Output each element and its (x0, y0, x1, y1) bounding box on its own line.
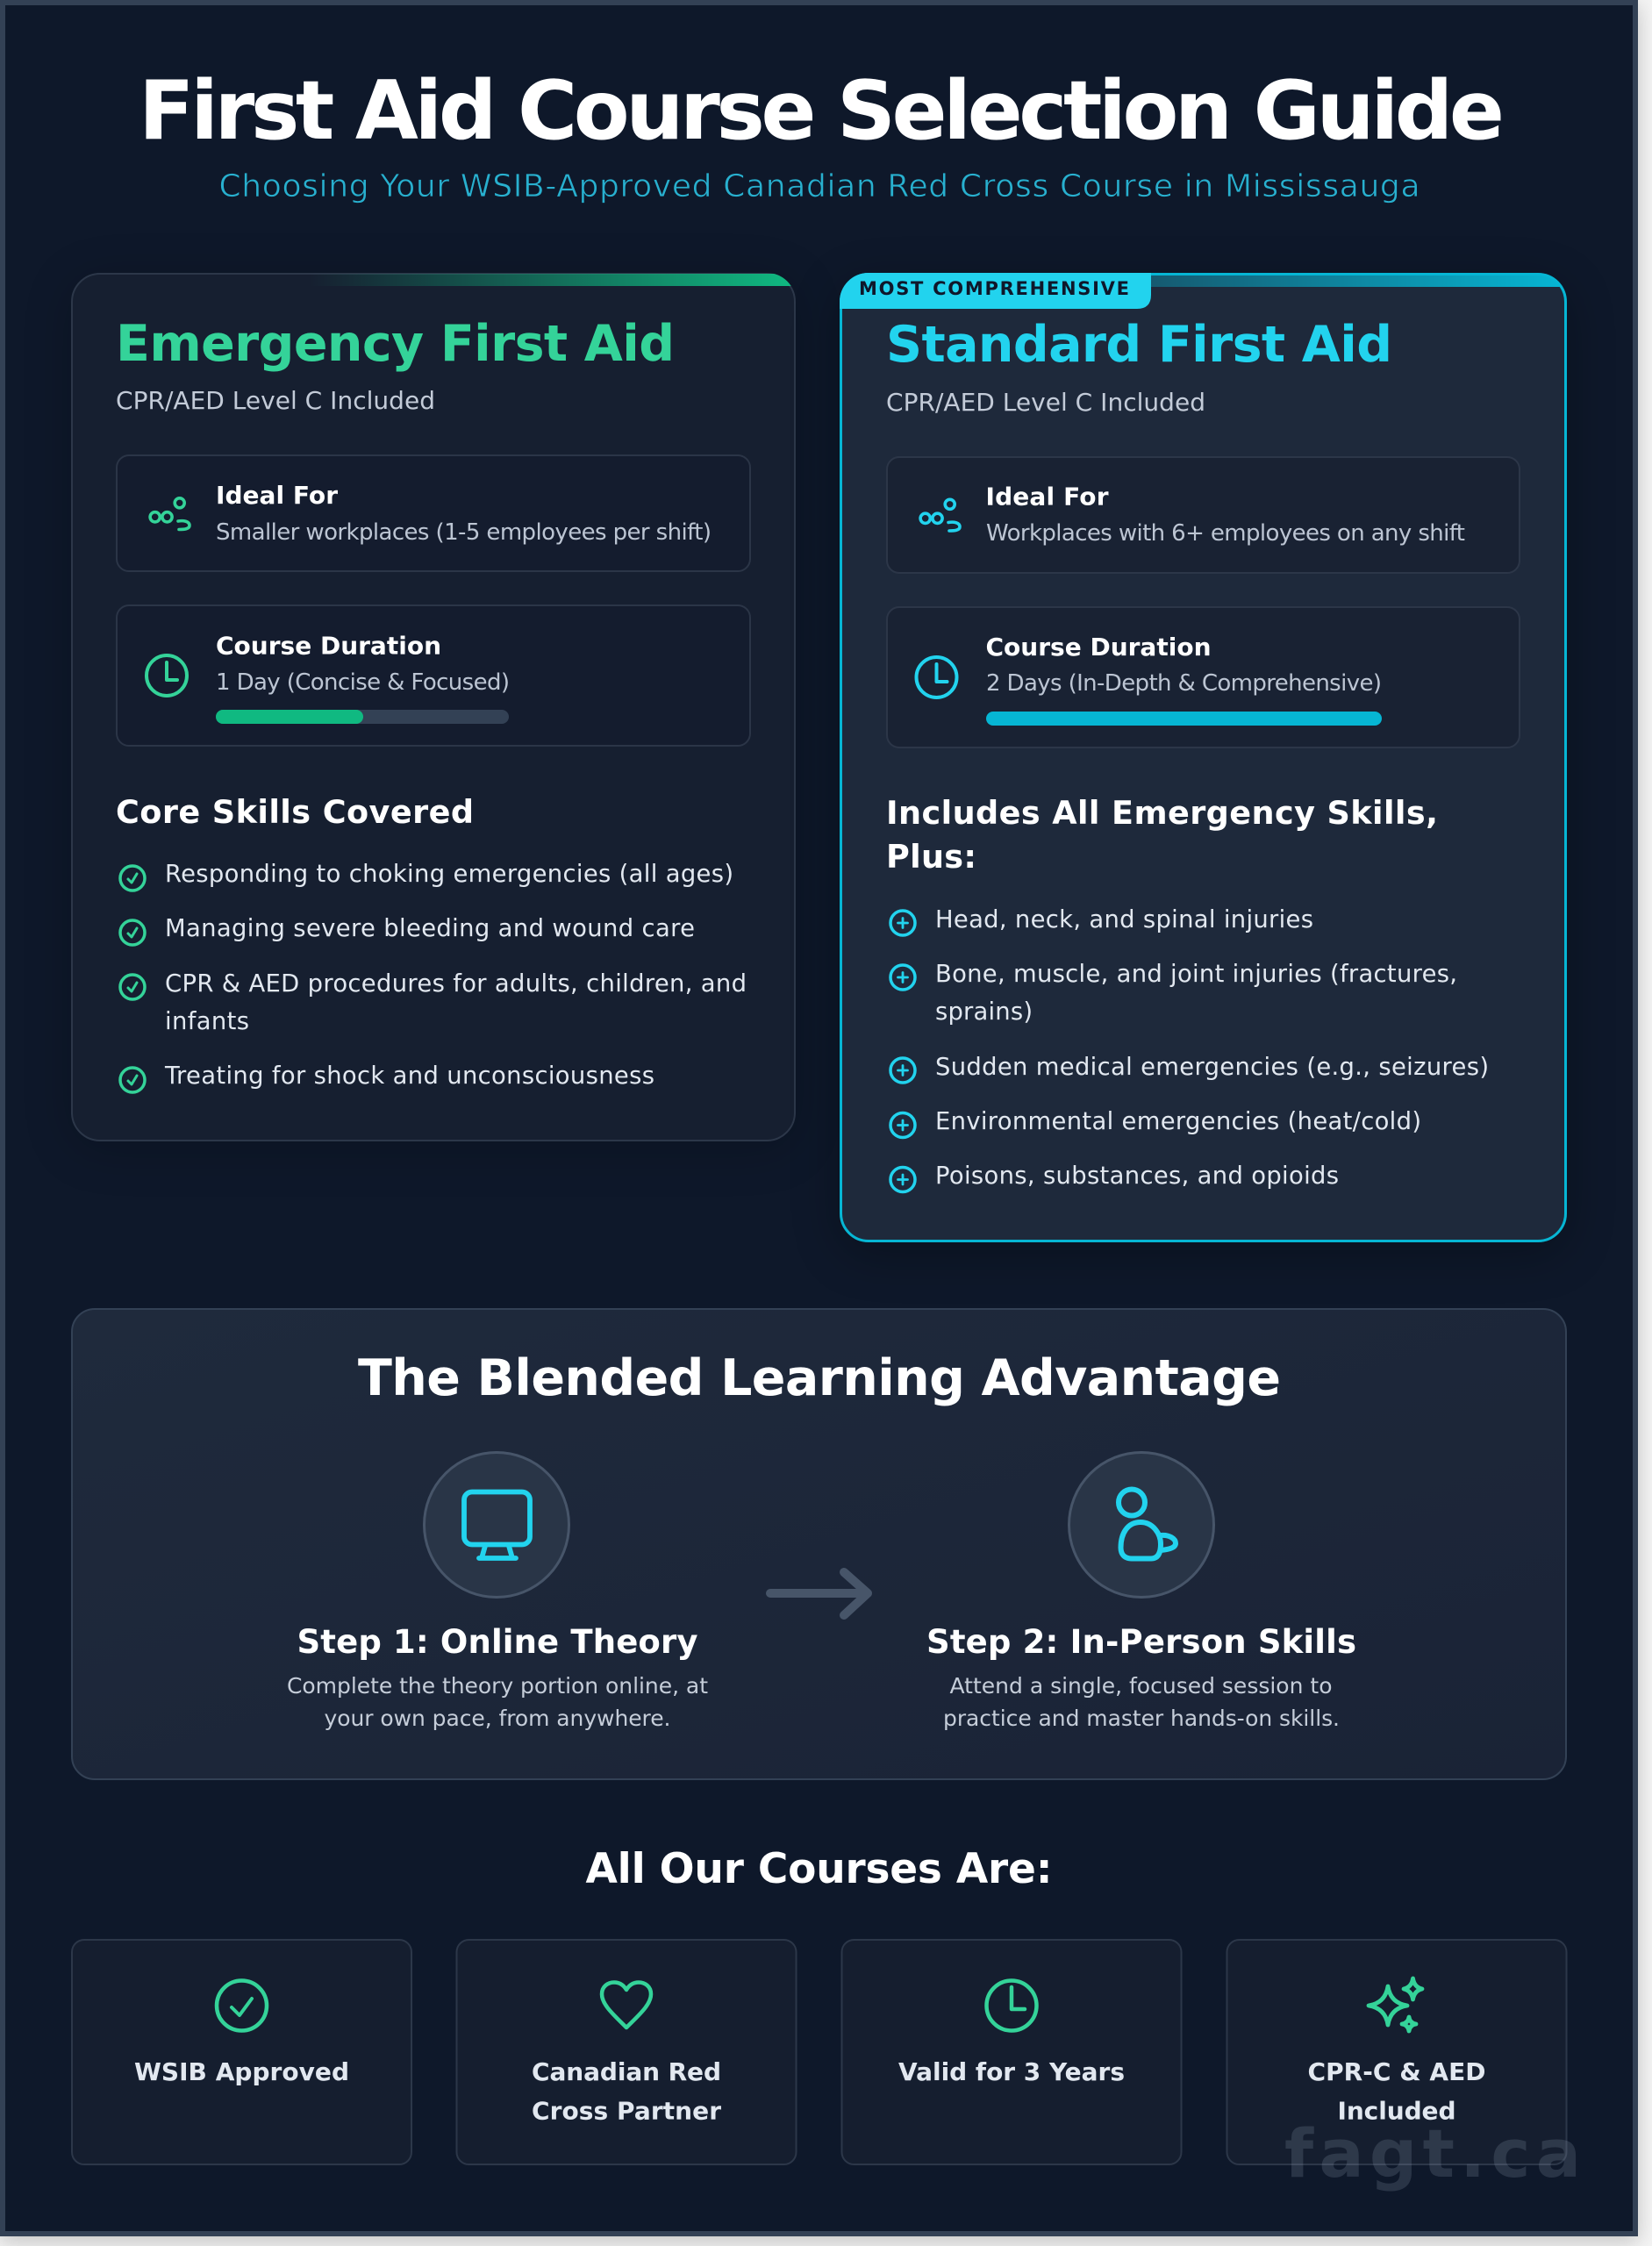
description: 2 Days (In-Depth & Comprehensive) (986, 670, 1382, 697)
info box: ideal for (887, 457, 1520, 573)
description: 1 Day (Concise & Focused) (216, 669, 510, 696)
label: Canadian Red (532, 2057, 721, 2086)
item: Responding to choking emergencies (all ages) (165, 861, 733, 888)
icon: clock (986, 1981, 1037, 2030)
tile: Canadian Red Cross partner (456, 1940, 797, 2164)
duration bar (986, 712, 1382, 726)
icon: plus (890, 1058, 915, 1083)
icon: clock (916, 657, 956, 697)
subheading: CPR/AED Level C Included (886, 388, 1205, 417)
subheading: CPR/AED Level C Included (116, 386, 435, 415)
label: Valid for 3 Years (898, 2057, 1125, 2086)
label (532, 2057, 721, 2125)
item: Poisons, substances, and opioids (935, 1162, 1339, 1190)
item: Sudden medical emergencies (e.g., seizures) (935, 1054, 1489, 1081)
item: Head, neck, and spinal injuries (935, 906, 1313, 933)
label: Course Duration (216, 632, 441, 660)
icon: plus (890, 1112, 915, 1137)
info box: course duration (117, 605, 750, 746)
step description: Attend a single, focused session to (949, 1673, 1332, 1699)
item: Treating for shock and unconsciousness (164, 1062, 654, 1090)
icon: monitor (425, 1453, 569, 1597)
heading: core skills: Core Skills Covered (116, 793, 474, 831)
step 2 (926, 1453, 1356, 1731)
icon: check (120, 866, 145, 891)
label: WSIB Approved (134, 2057, 349, 2086)
duration bar (216, 710, 509, 724)
item: CPR & AED procedures for adults, children, and (165, 970, 747, 998)
icon: plus (890, 1167, 915, 1191)
heading: Emergency First Aid: Emergency First Aid (116, 315, 675, 373)
icon: sparkles (1369, 1978, 1422, 2031)
title: First Aid Course Selection Guide (139, 63, 1505, 158)
description: Workplaces with 6+ employees on any shift (986, 520, 1465, 547)
tile: valid for 3 years (842, 1940, 1181, 2164)
badge: most comprehensive (840, 273, 1151, 309)
step 1 (287, 1453, 708, 1731)
heading: Standard First Aid: Standard First Aid (886, 316, 1392, 374)
list: additional skills (890, 906, 1489, 1191)
icon: check circle (217, 1981, 267, 2030)
label (1307, 2057, 1486, 2125)
icon: check (120, 1068, 145, 1092)
step description: practice and master hands-on skills. (943, 1706, 1340, 1731)
icon: plus (890, 965, 915, 990)
heading: includes all emergency skills: Includes All Emergency Skills, (886, 794, 1438, 832)
icon: people (920, 499, 960, 531)
item: Managing severe bleeding and wound care (165, 915, 695, 942)
panel: blended learning (72, 1309, 1566, 1779)
label: Included (1337, 2097, 1456, 2125)
item: Bone, muscle, and joint injuries (fractures, (935, 961, 1457, 988)
label: Ideal For (986, 483, 1109, 511)
heading: includes all emergency skills (886, 794, 1438, 876)
step description (287, 1673, 708, 1731)
icon: people (150, 498, 190, 530)
label: Course Duration (986, 633, 1211, 662)
label: Ideal For (216, 481, 338, 510)
watermark: fagt.ca (1284, 2114, 1581, 2192)
icon: check (120, 920, 145, 945)
tile: WSIB approved (72, 1940, 411, 2164)
icon: clock (147, 655, 187, 696)
icon: check (120, 975, 145, 999)
list: core skills (120, 861, 747, 1092)
item continuation: infants (165, 1008, 249, 1035)
panel: Emergency First Aid (71, 274, 796, 1149)
heading: The Blended Learning Advantage (358, 1349, 1281, 1407)
icon: heart (602, 1983, 651, 2028)
tile: CPR-C and AED included (1226, 1940, 1567, 2164)
icon: person (1069, 1453, 1214, 1597)
info box: ideal for (117, 455, 750, 571)
item: Environmental emergencies (heat/cold) (935, 1108, 1421, 1135)
step title: Step 2: In-Person Skills (926, 1623, 1356, 1661)
badge: most comprehensive: MOST COMPREHENSIVE (859, 278, 1129, 299)
step title: Step 1: Online Theory (297, 1623, 698, 1661)
arrow (770, 1572, 868, 1615)
heading: includes all emergency skills: Plus: (886, 838, 976, 876)
label: CPR-C & AED (1307, 2057, 1486, 2086)
panel: Standard First Aid (840, 273, 1567, 1255)
step description (943, 1673, 1340, 1731)
label: Cross Partner (532, 2097, 721, 2125)
description: Smaller workplaces (1-5 employees per shift) (216, 519, 712, 546)
subtitle: Choosing Your WSIB-Approved Canadian Red Cross Course in Mississauga (219, 168, 1420, 204)
heading: all our courses are: All Our Courses Are: (586, 1845, 1053, 1893)
item continuation: sprains) (935, 998, 1033, 1026)
info box: course duration (887, 607, 1520, 747)
icon: plus (890, 911, 915, 935)
step description: your own pace, from anywhere. (325, 1706, 670, 1731)
step description: Complete the theory portion online, at (287, 1673, 708, 1699)
